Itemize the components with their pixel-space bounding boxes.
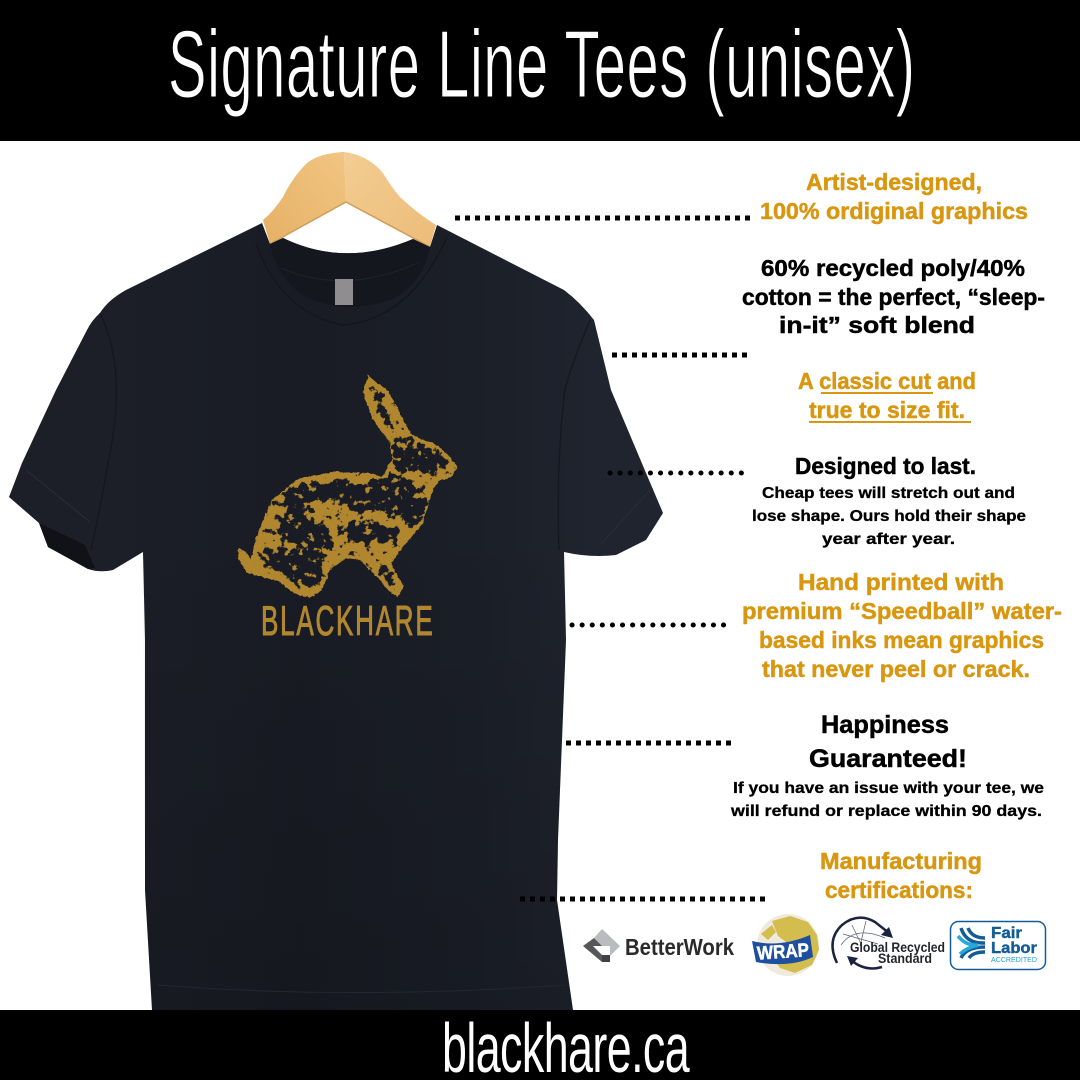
dotted leader: durability: [610, 470, 742, 476]
callout: hand printed inks: that never peel or crack.: [762, 656, 1030, 682]
callout: artist-designed: 100% ordiginal graphics: [760, 198, 1028, 224]
dotted leader: guarantee: [566, 740, 732, 746]
callout: designed to last: year after year.: [822, 531, 955, 548]
callout: happiness guaranteed: will refund or replace within 90 days.: [730, 803, 1042, 820]
callout: fabric blend: cotton = the perfect, “sleep-: [742, 284, 1045, 310]
callout: fabric blend: in-it” soft blend: [779, 312, 975, 338]
logo: Global Recycled Standard: Global Recycled: [850, 939, 945, 955]
callout: hand printed inks: [742, 569, 1062, 682]
callout: classic cut: [798, 368, 976, 423]
callout: manufacturing certifications: [820, 848, 982, 903]
shirt body: [9, 223, 663, 1010]
callout: designed to last: lose shape. Ours hold their shape: [752, 508, 1026, 525]
logo: Fair Labor Accredited: [950, 922, 1046, 970]
shirt lower shading: [143, 500, 573, 1010]
rabbit shading speckle: [238, 375, 458, 598]
dotted leader: fabric: [612, 352, 748, 358]
logo: BetterWork: [583, 929, 734, 962]
dotted leader: inks: [572, 622, 724, 628]
callout: designed to last: Cheap tees will stretch out and: [762, 485, 1015, 502]
callout: artist-designed: [760, 169, 1028, 224]
callout: manufacturing certifications: Manufacturing: [820, 848, 982, 874]
callout: classic cut: true to size fit.: [809, 397, 965, 423]
logo: WRAP: [752, 914, 819, 976]
callout: hand printed inks: premium “Speedball” water-: [742, 598, 1062, 624]
t-shirt photo: [9, 152, 663, 1010]
logo: WRAP: WRAP: [756, 940, 810, 965]
callout: fabric blend: 60% recycled poly/40%: [761, 255, 1025, 281]
logo: Fair Labor Accredited: Labor: [991, 940, 1037, 957]
callout: fabric blend: [742, 255, 1045, 338]
logo: Global Recycled Standard: [833, 918, 945, 968]
logo: BetterWork: BetterWork: [625, 934, 734, 960]
shirt logo wordmark: BLACKHARE: [261, 598, 433, 645]
header band: [0, 0, 1080, 141]
callout: classic cut: A classic cut and: [798, 368, 976, 394]
footer band: [0, 1010, 1080, 1080]
logo: Fair Labor Accredited: Fair: [991, 925, 1022, 942]
callout: happiness guaranteed: Guaranteed!: [809, 745, 967, 773]
callout: hand printed inks: based inks mean graphics: [759, 627, 1044, 653]
callout: hand printed inks: Hand printed with: [798, 569, 1004, 595]
logo: Fair Labor Accredited: ACCREDITED: [991, 955, 1038, 964]
callout: manufacturing certifications: certifications:: [825, 877, 973, 903]
rabbit graphic: [238, 375, 458, 598]
callout: designed to last: Designed to last.: [795, 453, 976, 479]
callout: happiness guaranteed: If you have an issue with your tee, we: [733, 780, 1044, 797]
callout: designed to last: [752, 453, 1026, 548]
rabbit silhouette: [238, 375, 458, 598]
dotted leader: graphics: [455, 216, 750, 220]
shirt seams and sleeve hems: [26, 237, 650, 992]
callout: happiness guaranteed: [730, 711, 1044, 820]
callout: happiness guaranteed: Happiness: [821, 711, 949, 739]
shirt inner neck: [270, 238, 430, 307]
dotted leader: certifications: [520, 896, 765, 902]
logo: Global Recycled Standard: Standard: [878, 950, 932, 966]
icon: wooden hanger: [263, 152, 436, 247]
title: Signature Line Tees (unisex): [168, 10, 915, 118]
callout: artist-designed: Artist-designed,: [806, 169, 982, 195]
neck label: [335, 279, 353, 305]
